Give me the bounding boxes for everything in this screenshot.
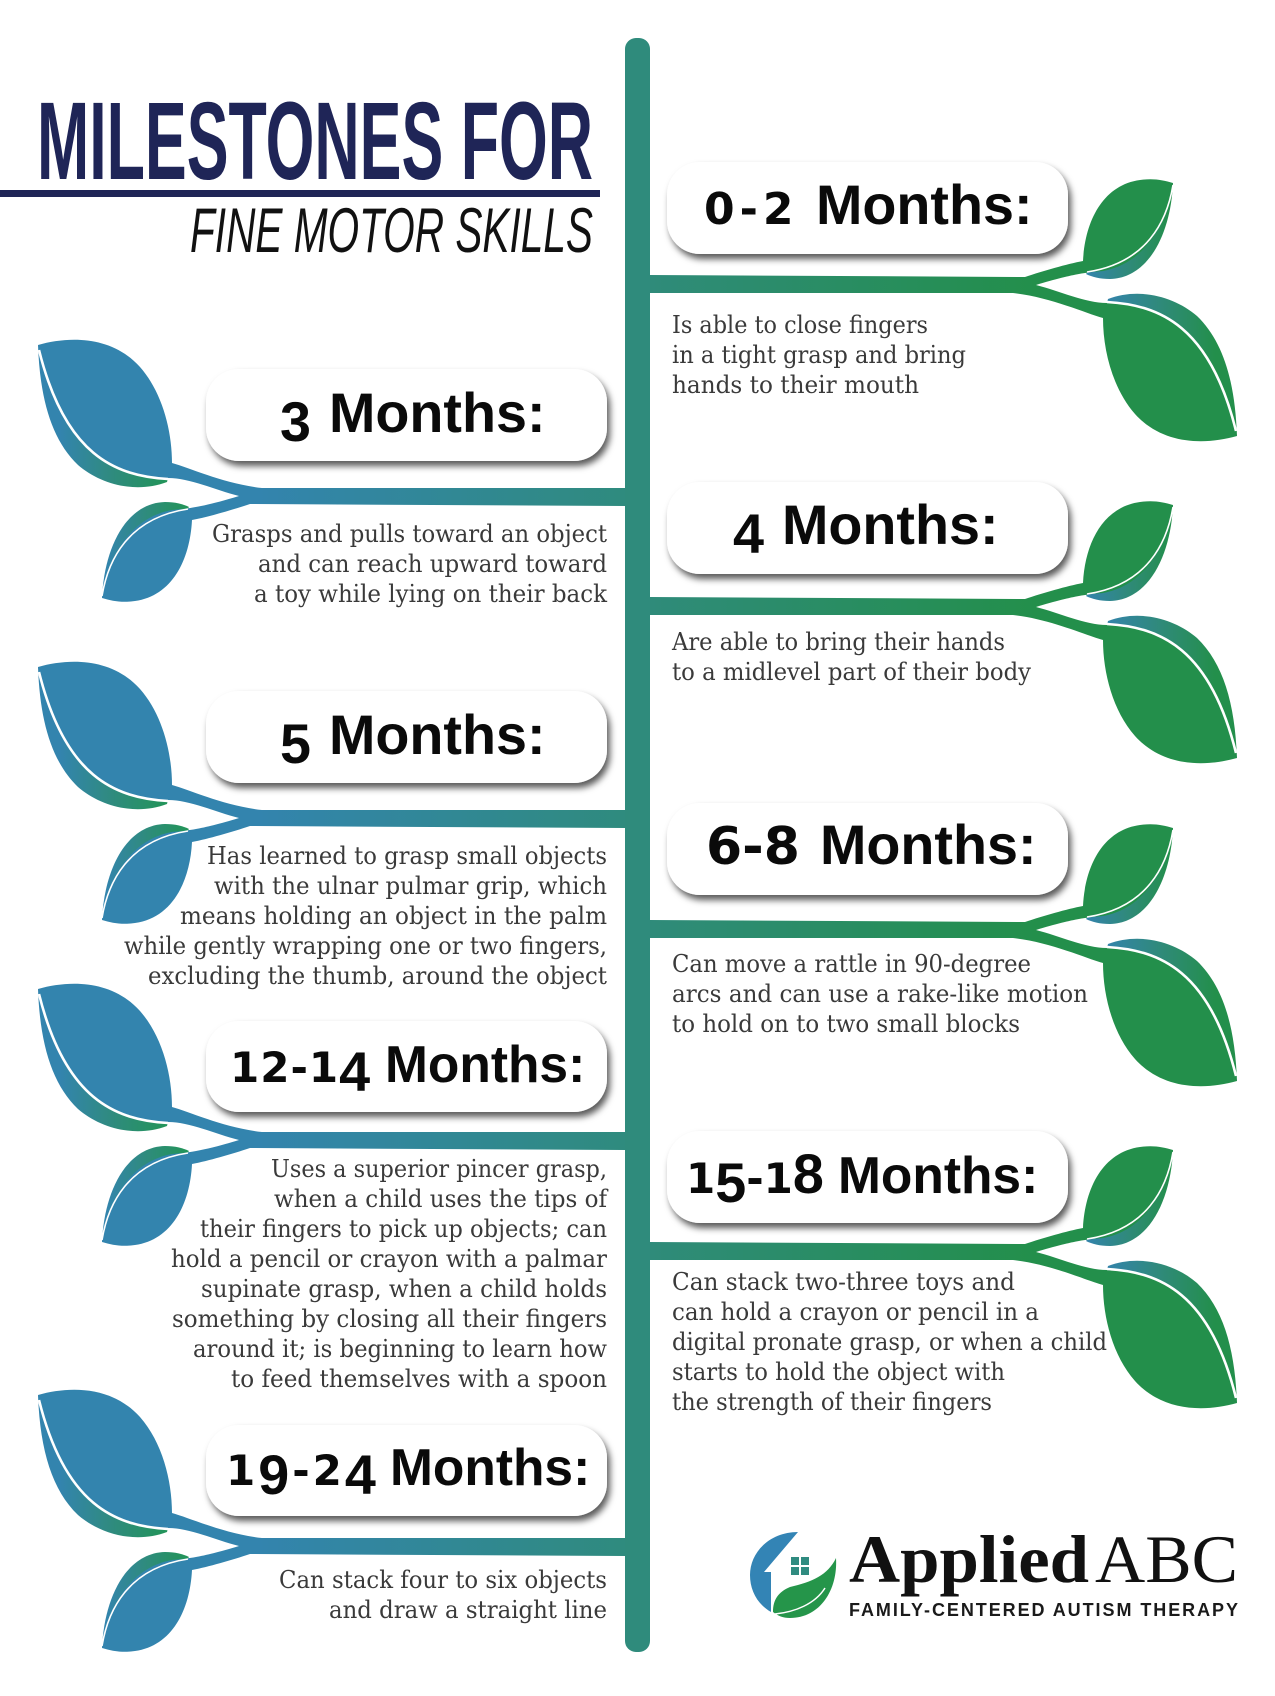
heading: 15-18 months: 5	[715, 1152, 746, 1214]
text: 3 months: Grasps and pulls toward an object	[212, 520, 607, 548]
text: 0-2 months: Is able to close fingers	[672, 311, 928, 339]
heading: 19-24 months: -2	[292, 1446, 345, 1495]
heading: 4 months: Months:	[782, 494, 998, 556]
milestone: 0-2 months	[650, 162, 1237, 441]
text: 5 months	[124, 842, 607, 990]
text: 15-18 months: the strength of their fingers	[672, 1388, 992, 1416]
text: 12-14 months: their fingers to pick up objects; can	[200, 1215, 607, 1243]
heading: 19-24 months: 4	[345, 1444, 376, 1506]
milestone: 4 months	[650, 482, 1237, 763]
text: 5 months: Has learned to grasp small objects	[207, 842, 607, 870]
text: 3 months: and can reach upward toward	[258, 550, 607, 578]
text: 19-24 months: Can stack four to six objects	[279, 1566, 607, 1594]
plant: 3 months	[38, 340, 625, 602]
pill: 4 months	[667, 482, 1068, 574]
plant: 4 months	[650, 501, 1237, 763]
subtitle: FINE MOTOR SKILLS	[190, 196, 593, 266]
plant: 19-24 months	[38, 1390, 625, 1652]
text: 6-8 months	[672, 950, 1088, 1038]
milestone: 19-24 months	[38, 1390, 625, 1652]
text: 5 months: means holding an object in the palm	[180, 902, 607, 930]
text: 5 months: with the ulnar pulmar grip, which	[214, 872, 607, 900]
heading: 12-14 months: 4	[339, 1041, 370, 1103]
pill: 6-8 months	[667, 803, 1068, 895]
milestone: 12-14 months	[38, 984, 625, 1393]
milestone: 5 months	[38, 662, 625, 990]
logo icon	[750, 1532, 836, 1618]
logo wordmark: Applied	[849, 1521, 1089, 1597]
text: 19-24 months	[279, 1566, 607, 1624]
heading: 0-2 months: Months:	[816, 174, 1032, 236]
milestone: 3 months	[38, 340, 625, 608]
text: 0-2 months: hands to their mouth	[672, 371, 919, 399]
text: 12-14 months: hold a pencil or crayon with a palmar	[171, 1245, 607, 1273]
text: 12-14 months: around it; is beginning to learn how	[193, 1335, 607, 1363]
text: 4 months	[671, 628, 1031, 686]
text: 6-8 months: Can move a rattle in 90-degree	[672, 950, 1031, 978]
plant: 5 months	[38, 662, 625, 924]
text: 15-18 months: can hold a crayon or pencil in a	[672, 1298, 1039, 1326]
text: 0-2 months	[672, 311, 966, 399]
heading: 12-14 months: Months:	[385, 1035, 585, 1093]
text: 12-14 months: something by closing all their fingers	[172, 1305, 607, 1333]
pill: 19-24 months	[206, 1425, 607, 1516]
text: 12-14 months: to feed themselves with a spoon	[231, 1365, 607, 1393]
heading: 19-24 months: 9	[258, 1444, 292, 1506]
logo	[750, 1521, 1238, 1620]
milestone: 6-8 months	[650, 803, 1237, 1086]
plant: 12-14 months	[38, 984, 625, 1246]
text: 12-14 months: when a child uses the tips of	[274, 1185, 609, 1213]
logo tagline: FAMILY-CENTERED AUTISM THERAPY	[849, 1600, 1238, 1620]
pill: 15-18 months	[667, 1131, 1068, 1223]
pill: 5 months	[206, 691, 607, 783]
text: 12-14 months	[171, 1155, 609, 1393]
heading: 15-18 months: Months:	[838, 1146, 1038, 1204]
heading: 3 months: Months:	[329, 382, 546, 444]
heading: 19-24 months: Months:	[390, 1438, 590, 1496]
heading: 0-2 months: 0-2	[704, 184, 798, 235]
heading: 5 months: Months:	[329, 704, 546, 766]
icon: leaf	[773, 1558, 836, 1618]
text: 15-18 months: starts to hold the object with	[672, 1358, 1005, 1386]
text: 4 months: Are able to bring their hands	[671, 628, 1005, 656]
icon: house arc	[750, 1532, 798, 1612]
text: 6-8 months: arcs and can use a rake-like motion	[672, 980, 1088, 1008]
central stem	[625, 38, 650, 1652]
pill: 0-2 months	[667, 162, 1068, 254]
heading: 6-8 months: Months:	[820, 814, 1036, 876]
title rule	[0, 190, 600, 197]
heading: 5 months: 5	[280, 713, 311, 775]
title	[0, 80, 600, 266]
heading: 15-18 months: 8	[793, 1143, 824, 1205]
text: 12-14 months: Uses a superior pincer grasp,	[271, 1155, 607, 1183]
title line 1: MILESTONES FOR	[37, 80, 593, 203]
heading: 19-24 months: 1	[226, 1446, 258, 1495]
logo wordmark: ABC	[1095, 1521, 1238, 1597]
heading: 6-8 months: 6-8	[706, 817, 800, 877]
text: 15-18 months	[672, 1268, 1107, 1416]
pill: 3 months	[206, 369, 607, 461]
text: 15-18 months: digital pronate grasp, or when a child	[672, 1328, 1107, 1356]
text: 12-14 months: supinate grasp, when a child holds	[201, 1275, 607, 1303]
text: 5 months: while gently wrapping one or two fingers,	[124, 932, 607, 960]
plant: 15-18 months	[650, 1146, 1237, 1408]
heading: 4 months: 4	[733, 503, 764, 565]
text: 6-8 months: to hold on to two small blocks	[672, 1010, 1020, 1038]
plant: 0-2 months	[650, 179, 1237, 441]
heading: 15-18 months: -1	[746, 1154, 793, 1203]
text: 5 months: excluding the thumb, around the object	[148, 962, 607, 990]
logo wordmark	[849, 1521, 1238, 1597]
icon: window	[791, 1557, 809, 1575]
pill: 12-14 months	[206, 1021, 607, 1112]
text: 0-2 months: in a tight grasp and bring	[672, 341, 966, 369]
heading: 15-18 months: 1	[686, 1154, 715, 1203]
heading: 12-14 months: 12-1	[230, 1043, 339, 1092]
text: 3 months: a toy while lying on their back	[254, 580, 607, 608]
text: 19-24 months: and draw a straight line	[329, 1596, 607, 1624]
text: 15-18 months: Can stack two-three toys and	[672, 1268, 1015, 1296]
heading: 3 months: 3	[280, 391, 311, 453]
text: 3 months	[212, 520, 607, 608]
text: 4 months: to a midlevel part of their body	[672, 658, 1031, 686]
plant: 6-8 months	[650, 824, 1237, 1086]
milestone: 15-18 months	[650, 1131, 1237, 1416]
